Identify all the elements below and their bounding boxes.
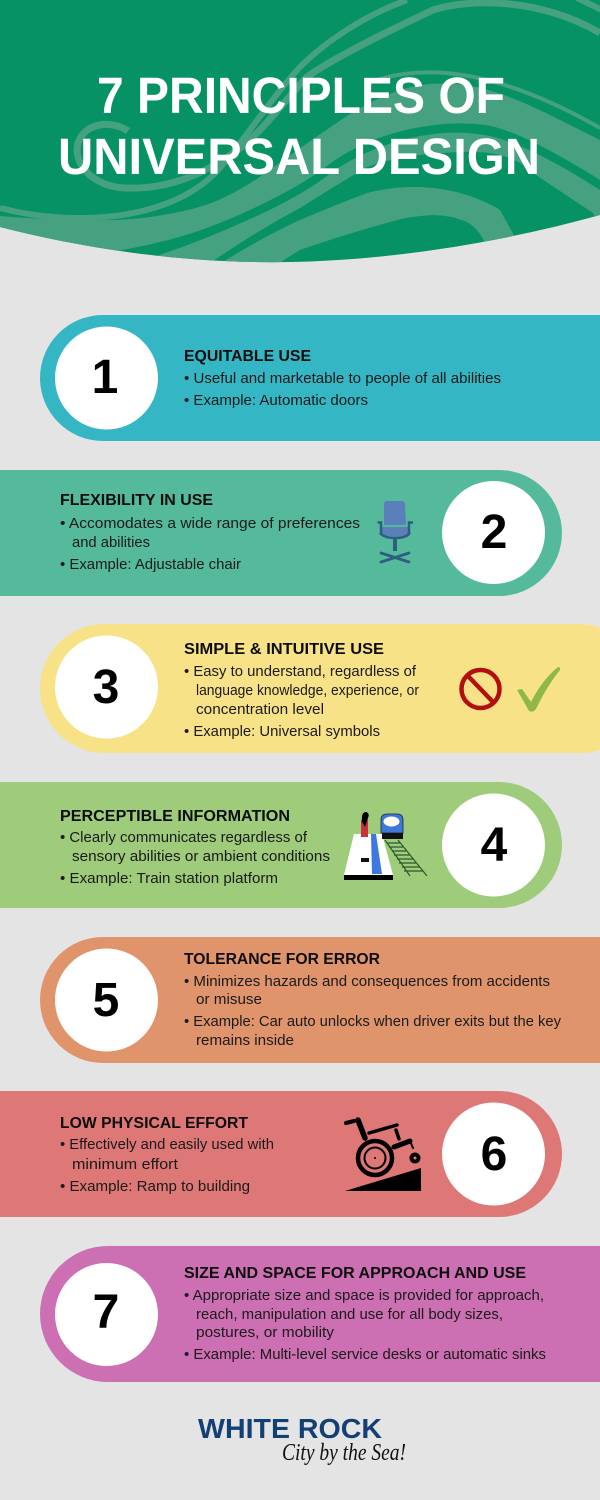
heading 3: SIMPLE & INTUITIVE USE bbox=[184, 641, 384, 658]
number circle 2: 2 bbox=[481, 506, 507, 559]
number circle 5 bbox=[55, 948, 158, 1052]
text 6: • Effectively and easily used with bbox=[60, 1137, 274, 1153]
text 1: • Example: Automatic doors bbox=[184, 393, 368, 409]
text 2 bbox=[60, 516, 360, 573]
text 3: language knowledge, experience, or bbox=[196, 683, 419, 699]
title: 7 PRINCIPLES OF bbox=[97, 67, 505, 124]
panel 1: equitable use bbox=[40, 315, 600, 441]
text 5: • Minimizes hazards and consequences from accidents bbox=[184, 974, 550, 990]
text 7: postures, or mobility bbox=[196, 1325, 335, 1341]
text 6: • Example: Ramp to building bbox=[60, 1179, 250, 1195]
panel 2: flexibility in use bbox=[0, 470, 562, 596]
heading 2: FLEXIBILITY IN USE bbox=[60, 492, 213, 509]
title bbox=[58, 67, 540, 185]
text 5: remains inside bbox=[196, 1033, 294, 1049]
text 2: • Accomodates a wide range of preferences bbox=[60, 516, 360, 532]
number circle 2 bbox=[442, 481, 545, 584]
text 4: sensory abilities or ambient conditions bbox=[72, 849, 330, 865]
icon: train platform bbox=[344, 812, 427, 880]
panel 6: low physical effort bbox=[0, 1091, 562, 1217]
heading 4: PERCEPTIBLE INFORMATION bbox=[60, 808, 290, 825]
text 6: minimum effort bbox=[72, 1157, 178, 1173]
text 5 bbox=[184, 974, 562, 1049]
text 4: • Clearly communicates regardless of bbox=[60, 830, 308, 846]
heading 6: LOW PHYSICAL EFFORT bbox=[60, 1115, 249, 1132]
number circle 6 bbox=[442, 1102, 545, 1206]
text 7 bbox=[184, 1288, 546, 1363]
header wave decoration bbox=[0, 0, 600, 280]
text 6 bbox=[60, 1137, 274, 1195]
text 7: • Appropriate size and space is provided for approach, bbox=[184, 1288, 544, 1304]
panel 5: tolerance for error bbox=[40, 937, 600, 1063]
number circle 4 bbox=[442, 794, 545, 896]
panel 4: perceptible information bbox=[0, 782, 562, 908]
icon: check mark bbox=[517, 667, 560, 712]
icon: chair bbox=[378, 501, 413, 562]
text 1 bbox=[184, 371, 501, 409]
heading 7: SIZE AND SPACE FOR APPROACH AND USE bbox=[184, 1265, 526, 1282]
number circle 1 bbox=[55, 326, 158, 430]
number circle 7 bbox=[55, 1263, 158, 1366]
text 3: • Easy to understand, regardless of bbox=[184, 664, 417, 680]
icon: prohibition sign bbox=[462, 670, 500, 708]
number circle 3: 3 bbox=[93, 661, 119, 714]
number circle 3 bbox=[55, 636, 158, 738]
text 4 bbox=[60, 830, 330, 887]
number circle 7: 7 bbox=[93, 1286, 119, 1339]
panel 7: size and space bbox=[40, 1246, 600, 1382]
text 3: • Example: Universal symbols bbox=[184, 724, 380, 740]
number circle 5: 5 bbox=[93, 974, 119, 1027]
logo: White Rock: City by the Sea! bbox=[282, 1440, 406, 1466]
number circle 1: 1 bbox=[92, 351, 118, 404]
text 5: or misuse bbox=[196, 992, 262, 1008]
text 2: and abilities bbox=[72, 535, 150, 551]
text 4: • Example: Train station platform bbox=[60, 871, 278, 887]
panel 3: simple and intuitive use bbox=[40, 624, 600, 753]
header banner bbox=[0, 0, 600, 280]
logo: White Rock bbox=[198, 1413, 406, 1466]
text 7: • Example: Multi-level service desks or automatic sinks bbox=[184, 1347, 546, 1363]
heading 5: TOLERANCE FOR ERROR bbox=[184, 951, 380, 968]
text 5: • Example: Car auto unlocks when driver exits but the key bbox=[184, 1014, 562, 1030]
icon: wheelchair on ramp bbox=[345, 1120, 421, 1191]
text 1: • Useful and marketable to people of all abilities bbox=[184, 371, 501, 387]
title: UNIVERSAL DESIGN bbox=[58, 128, 540, 185]
number circle 4: 4 bbox=[481, 819, 508, 872]
text 7: reach, manipulation and use for all body sizes, bbox=[196, 1307, 503, 1323]
number circle 6: 6 bbox=[481, 1128, 507, 1181]
text 3: concentration level bbox=[196, 702, 324, 718]
text 2: • Example: Adjustable chair bbox=[60, 557, 241, 573]
text 3 bbox=[184, 664, 419, 740]
logo: White Rock: WHITE ROCK bbox=[198, 1413, 382, 1444]
heading 1: EQUITABLE USE bbox=[184, 348, 311, 365]
